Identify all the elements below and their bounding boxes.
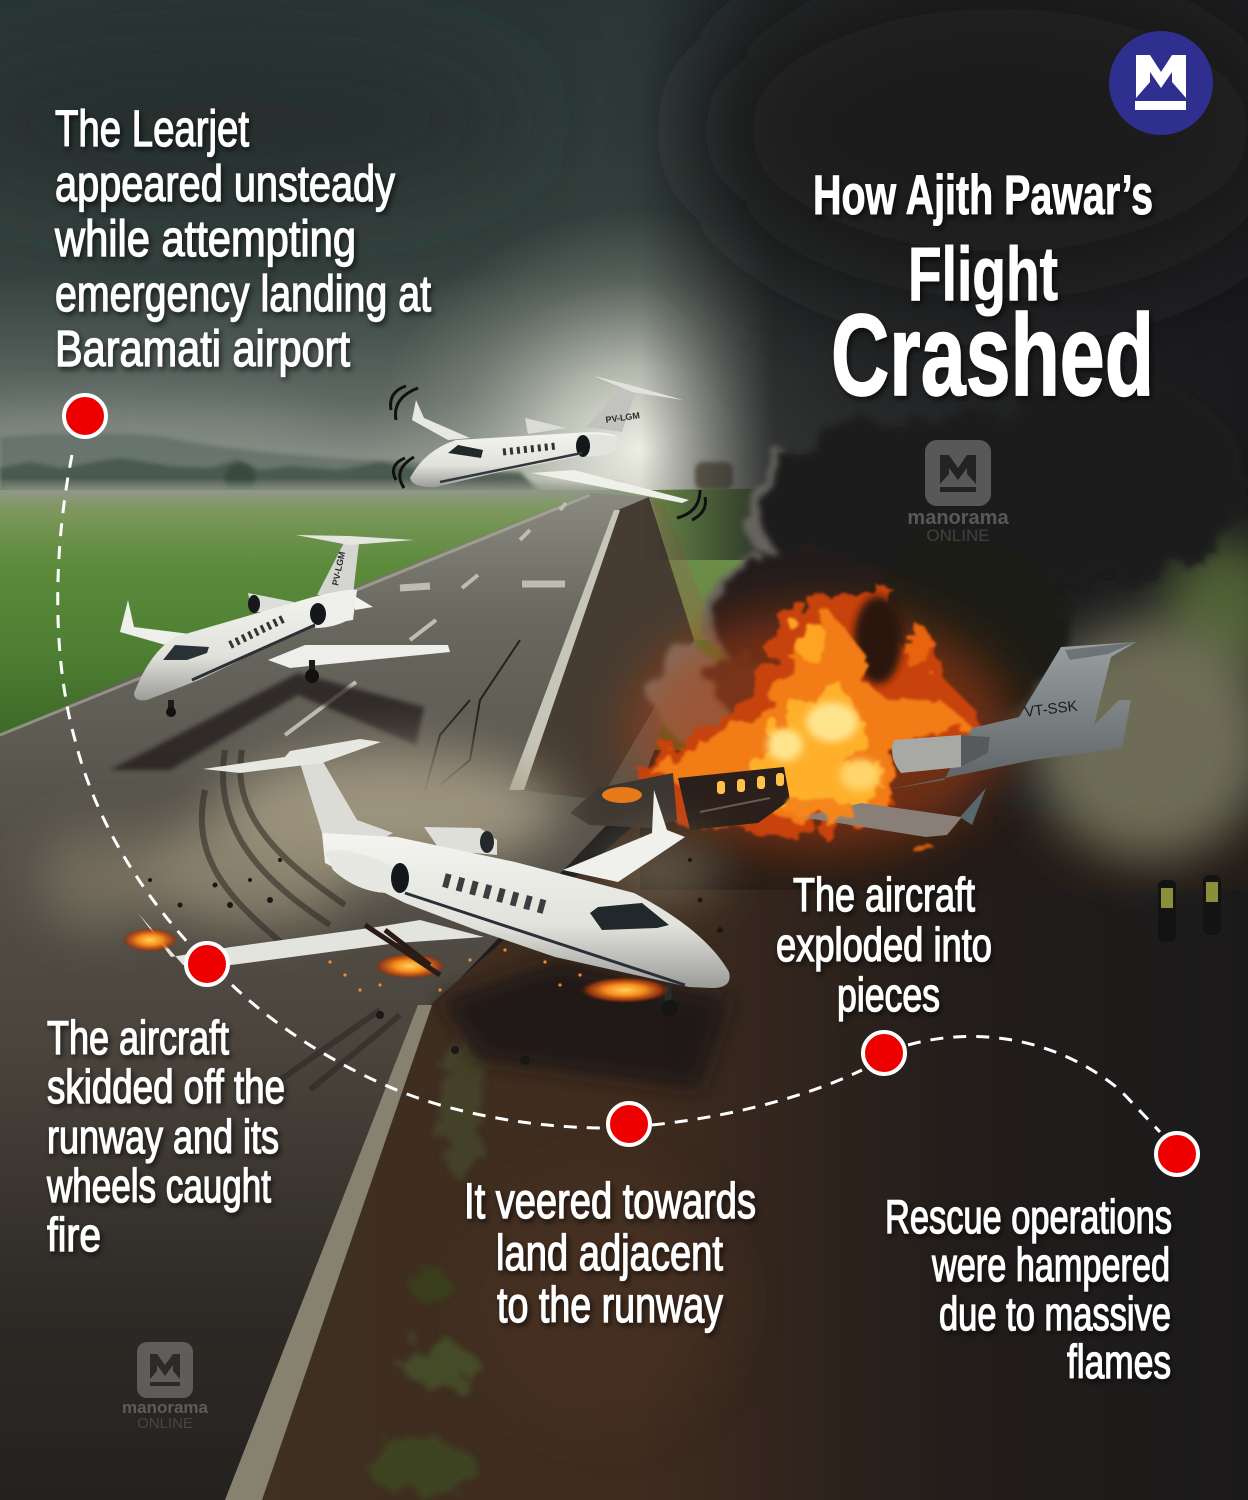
- text: skidded off runway: wheels caught: [46, 1159, 271, 1212]
- smoke plume: [658, 375, 1245, 745]
- runway stripes: [509, 510, 620, 790]
- logo: Manorama: [1109, 31, 1213, 135]
- title: Flight: [908, 232, 1058, 317]
- text: veered towards land: [464, 1173, 756, 1333]
- point 3 marker: [608, 1103, 650, 1145]
- wreck: tail section VT-SSK: VT-SSK: [1023, 698, 1078, 721]
- title: [813, 163, 1154, 420]
- dust right of wreck: [1030, 620, 1248, 860]
- ground flames near tail: [785, 798, 932, 849]
- text: rescue operations: due to massive: [939, 1287, 1171, 1340]
- dust cloud: [40, 750, 720, 1090]
- text: skidded off runway: runway and its: [47, 1110, 279, 1163]
- plane: landing on runway: PV-LGM: [330, 551, 347, 586]
- text: Learjet unsteady: [54, 100, 431, 377]
- right sky darkness: [640, 0, 1248, 560]
- text: veered towards land: It veered towards: [464, 1173, 756, 1229]
- text: exploded: pieces: [837, 968, 940, 1021]
- text: Learjet unsteady: appeared unsteady: [55, 155, 395, 212]
- grass tufts: [365, 1040, 484, 1493]
- point 5 marker: [1156, 1133, 1198, 1175]
- watermark: lower: ONLINE: [137, 1415, 193, 1432]
- dirt: [225, 820, 1248, 1500]
- text: veered towards land: to the runway: [497, 1277, 723, 1333]
- text: rescue operations: flames: [1067, 1335, 1171, 1388]
- point 1 marker: [64, 395, 106, 437]
- text: skidded off runway: skidded off the: [47, 1060, 285, 1113]
- text: Learjet unsteady: while attempting: [54, 210, 356, 267]
- text: exploded: [776, 868, 992, 1021]
- damaged wing sparks: [374, 953, 446, 979]
- cracks: [425, 640, 520, 790]
- watermark: lower: manorama: [122, 1398, 209, 1417]
- rescue workers: [1158, 875, 1221, 942]
- text: veered towards land: land adjacent: [496, 1225, 723, 1281]
- tyre marks: [202, 750, 400, 1090]
- text: skidded off runway: [46, 1011, 285, 1261]
- text: exploded: exploded into: [776, 918, 992, 971]
- wreck: tail section VT-SSK: [801, 642, 1136, 837]
- point 2 marker: [186, 943, 228, 985]
- dark scorched ground under main plane: [440, 960, 730, 1090]
- point 4 marker: [863, 1032, 905, 1074]
- watermark: upper: [907, 440, 1009, 545]
- dashed flight path: [58, 455, 1160, 1132]
- watermark: lower: [122, 1342, 209, 1432]
- text: skidded off runway: The aircraft: [47, 1011, 229, 1064]
- text: skidded off runway: fire: [47, 1208, 101, 1261]
- plane: skidding in foreground: [122, 739, 730, 1065]
- text: Learjet unsteady: Baramati airport: [55, 320, 350, 377]
- watermark: upper: manorama: [907, 507, 1009, 529]
- tree line: [0, 458, 540, 497]
- text: rescue operations: [885, 1190, 1172, 1388]
- plane: landing on runway: [110, 535, 450, 770]
- text: Learjet unsteady: emergency landing at: [55, 265, 431, 322]
- runway: [0, 493, 694, 1500]
- watermark: upper: ONLINE: [926, 526, 990, 545]
- fire: [630, 585, 1010, 850]
- text: Learjet unsteady: The Learjet: [55, 100, 249, 157]
- wreck: burning cabin: [678, 767, 790, 830]
- plane: hovering over runway: PV-LGM: [605, 410, 640, 425]
- distant hills: [0, 433, 420, 480]
- wreck: broken nose section: [570, 773, 677, 828]
- text: exploded: The aircraft: [793, 868, 975, 921]
- plane: hovering over runway: [391, 376, 705, 520]
